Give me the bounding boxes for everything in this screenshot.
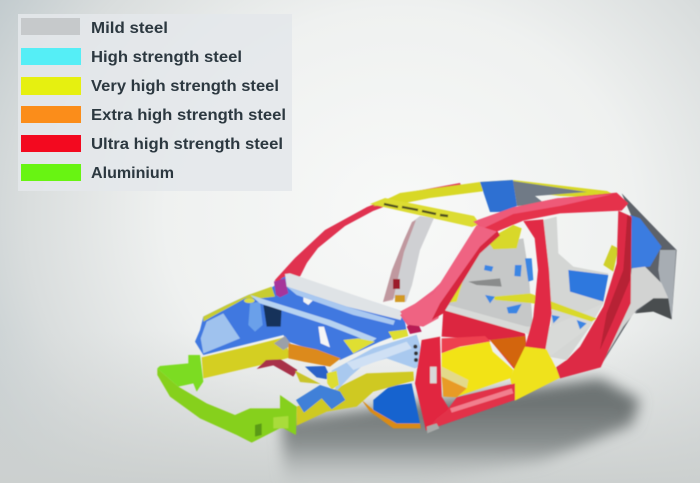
front floor, bright red pad <box>442 336 491 353</box>
upper rail grey joint <box>274 336 292 350</box>
near side body ring, red <box>400 193 632 433</box>
yellow strut top <box>203 287 275 322</box>
rear quarter <box>603 193 677 362</box>
legend: extra high strength steel <box>21 106 286 124</box>
far A-pillar <box>275 183 462 290</box>
legend: mild steel: Mild steel <box>91 20 168 37</box>
central floor tunnel, orange edge <box>362 400 421 428</box>
legend: extra high strength steel: Extra high strength steel <box>91 107 286 124</box>
near rail, yellow <box>297 372 414 426</box>
floor shadow under car <box>282 378 640 483</box>
crash box details <box>273 416 288 428</box>
legend: aluminium: Aluminium <box>91 165 174 182</box>
car body structure <box>157 180 677 443</box>
yellow cowl insert <box>343 338 375 353</box>
legend: very high strength steel <box>21 77 279 95</box>
far A-pillar base <box>274 260 308 282</box>
interior blue brackets <box>484 258 587 329</box>
roof grey panel <box>513 181 587 206</box>
dark red rail <box>257 359 297 377</box>
cabin interior <box>443 217 618 360</box>
hinge pillar <box>415 337 450 431</box>
B-pillar <box>523 219 552 350</box>
orange rail <box>288 343 341 367</box>
legend: ultra high strength steel: Ultra high strength steel <box>91 136 283 153</box>
cross members yellow <box>493 293 597 322</box>
purple upper joint <box>274 278 288 297</box>
rear interior grey <box>543 217 608 360</box>
legend: high strength steel: High strength steel <box>91 49 242 66</box>
front header, yellow <box>370 198 480 227</box>
cowl, light grey <box>285 273 403 320</box>
rails and bumper <box>157 335 426 443</box>
front floor, orange <box>490 336 526 368</box>
legend: mild steel <box>21 18 168 37</box>
near fender rail, light blue <box>332 335 426 391</box>
front floor, yellow <box>442 342 513 397</box>
left crash box, green <box>157 355 203 392</box>
firewall, blue <box>195 273 407 360</box>
roof blue panel <box>480 180 517 212</box>
dark interior recesses <box>468 278 502 287</box>
firewall openings <box>318 327 330 347</box>
far side of the cabin and roof <box>275 180 620 302</box>
header holes <box>384 204 448 216</box>
A-pillar <box>400 225 497 327</box>
interior grey side <box>443 238 533 330</box>
front floor, red <box>442 310 527 370</box>
near A-pillar base, pink <box>400 282 442 327</box>
legend: aluminium <box>21 164 174 182</box>
bumper beam, green <box>157 368 297 443</box>
wheel arch, grey <box>603 267 668 360</box>
rear quarter blue panel <box>630 215 662 268</box>
far B-pillar <box>383 216 434 302</box>
rear seat blue panel <box>568 270 608 302</box>
door sill <box>426 383 515 431</box>
strut light patches <box>201 313 240 353</box>
front structure <box>195 260 442 360</box>
floor and door openings <box>442 310 527 397</box>
left rail, yellow <box>202 337 291 378</box>
strut brace, light blue <box>250 295 377 343</box>
legend: very high strength steel: Very high strength steel <box>91 78 279 95</box>
legend: high strength steel <box>21 48 242 66</box>
blue bracket <box>296 385 345 413</box>
small yellow rail <box>295 371 321 384</box>
central floor tunnel, blue <box>373 383 420 423</box>
dark recess in strut tower <box>263 305 282 327</box>
legend: ultra high strength steel <box>21 135 283 153</box>
rear outer dark panel <box>603 193 677 362</box>
B-pillar base, yellow <box>510 347 561 401</box>
yellow bracket <box>327 371 339 389</box>
lower blue arm <box>305 366 332 380</box>
roof rail <box>473 193 628 232</box>
rear door ring <box>556 211 632 378</box>
roof rail, yellow <box>373 180 620 206</box>
legend panel <box>18 14 292 191</box>
